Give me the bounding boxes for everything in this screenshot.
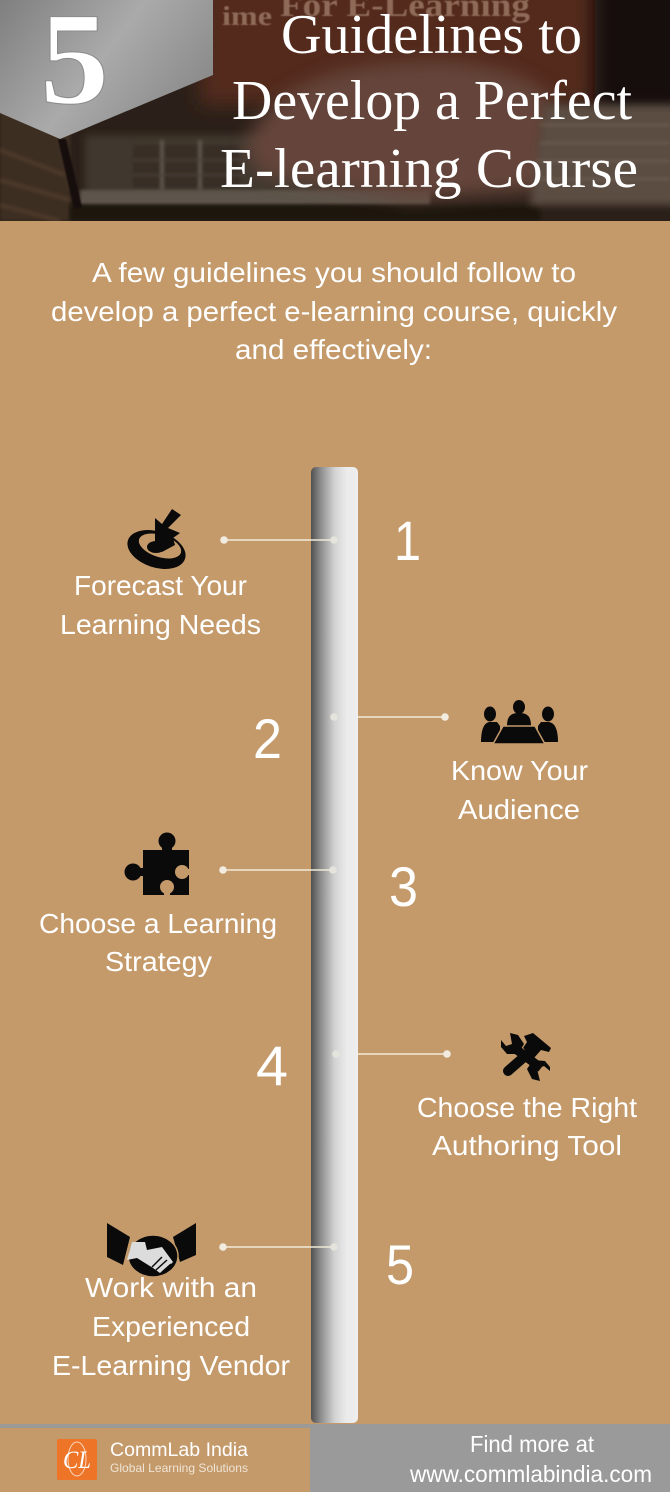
- title: [220, 4, 638, 200]
- number 5: 5: [386, 1233, 414, 1296]
- label 5: Work with an: [85, 1272, 257, 1303]
- icon: target with arrow: [122, 509, 191, 576]
- title: Develop a Perfect: [232, 70, 632, 132]
- link text: Find more at: [470, 1431, 595, 1457]
- header banner: [0, 0, 670, 221]
- connector 2: [330, 713, 449, 721]
- number 4: 4: [256, 1034, 288, 1097]
- label 2: Know Your: [451, 755, 588, 786]
- label 5: Experienced: [92, 1311, 250, 1342]
- label 3: [39, 908, 277, 977]
- label 2: Audience: [458, 794, 580, 825]
- step 1: forecast your learning needs: [60, 509, 421, 640]
- number 1: 1: [394, 509, 421, 572]
- step 5: work with an experienced e-learning vendor: [52, 1223, 414, 1381]
- header banner: ime: [222, 1, 272, 31]
- label 3: Strategy: [105, 946, 212, 977]
- badge: pentagon with number 5: [0, 0, 213, 139]
- label 1: [60, 570, 261, 640]
- label 4: [417, 1092, 637, 1161]
- link text: www.commlabindia.com: [409, 1461, 652, 1487]
- step 3: choose a learning strategy: [39, 832, 418, 977]
- connector 4: [332, 1050, 451, 1058]
- intro text: and effectively:: [235, 334, 432, 365]
- number 2: 2: [253, 707, 282, 770]
- label 2: [451, 755, 588, 825]
- label 5: E-Learning Vendor: [52, 1350, 290, 1381]
- intro text: develop a perfect e-learning course, quickly: [51, 296, 617, 327]
- link text: [409, 1431, 652, 1487]
- timeline bar: [311, 467, 358, 1423]
- icon: handshake: [107, 1223, 196, 1277]
- title: Guidelines to: [281, 4, 582, 66]
- label 1: Forecast Your: [74, 570, 247, 601]
- title: E-learning Course: [220, 138, 638, 200]
- step 4: choose the right authoring tool: [256, 1033, 637, 1161]
- connector 5: [219, 1243, 338, 1251]
- label 3: Choose a Learning: [39, 908, 277, 939]
- connector 1: [220, 536, 338, 544]
- connector 3: [219, 866, 337, 874]
- intro text: [51, 257, 617, 365]
- logo: CommLab India: Global Learning Solutions: [110, 1461, 248, 1475]
- label 1: Learning Needs: [60, 609, 261, 640]
- logo: CommLab India: CommLab India: [110, 1440, 248, 1461]
- label 4: Choose the Right: [417, 1092, 637, 1123]
- logo: CommLab India: [57, 1439, 248, 1480]
- logo: CommLab India: CL: [63, 1447, 91, 1474]
- step 2: know your audience: [253, 700, 588, 825]
- icon: people at a table: [481, 700, 558, 744]
- label 5: [52, 1272, 290, 1381]
- footer: [0, 1424, 670, 1492]
- icon: hammer and wrench: [501, 1033, 551, 1081]
- icon: puzzle piece: [124, 832, 190, 896]
- label 4: Authoring Tool: [432, 1130, 622, 1161]
- number 3: 3: [389, 855, 418, 918]
- intro text: A few guidelines you should follow to: [92, 257, 576, 288]
